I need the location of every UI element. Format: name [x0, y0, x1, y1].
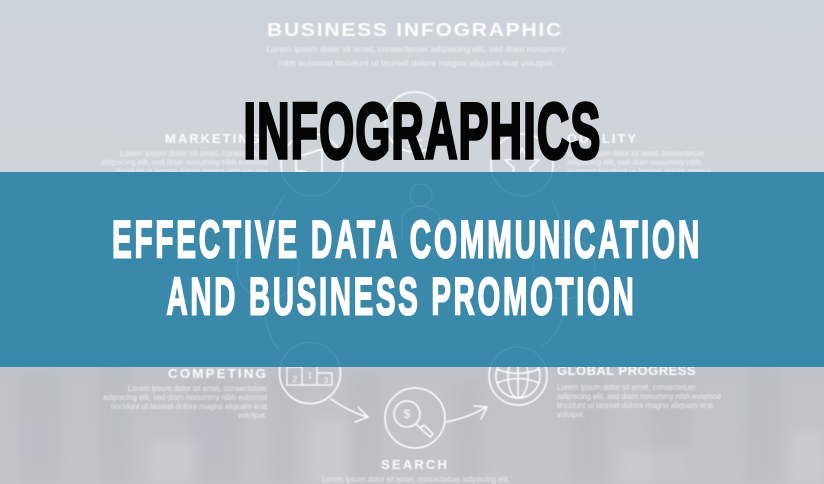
faint artwork behind banner	[237, 134, 595, 405]
marketing block: adipiscing elit, sed diam nonummy nibh euismod	[101, 158, 268, 167]
icon: globe	[489, 347, 547, 405]
marketing block: Lorem ipsum dolor sit amet, consectetuer	[120, 149, 268, 158]
icon: podium: 2	[293, 375, 298, 384]
icon: search magnifier with dollar: $	[404, 407, 411, 421]
quality block: Lorem ipsum dolor sit amet, consectetuer	[567, 149, 705, 158]
global progress heading and text: Lorem ipsum dolor sit amet, consectetuer	[557, 383, 696, 392]
faded infographic artwork	[101, 20, 721, 484]
intro text: Lorem ipsum dolor sit amet, consectetuer adipiscing elit, sed diam nonummy	[266, 45, 566, 54]
quality block: QUALITY	[567, 131, 638, 146]
search heading and text: Lorem ipsum dolor sit amet, consectetuer adipiscing elit,	[322, 475, 510, 484]
search heading and text	[322, 457, 510, 484]
quality block	[567, 131, 711, 176]
icon: podium: 1	[308, 371, 313, 380]
competing heading and text: volutpat.	[238, 411, 267, 420]
icon: search magnifier with dollar	[385, 388, 445, 448]
icon: podium: 3	[324, 376, 329, 385]
marketing block	[101, 131, 269, 176]
marketing block: MARKETING	[165, 131, 262, 146]
global progress heading and text: tincidunt ut laoreet dolore magna aliquam erat	[557, 401, 714, 410]
icon: podium	[280, 342, 340, 404]
competing heading and text: adipiscing elit, sed diam nonummy nibh euismod	[103, 393, 267, 402]
global progress heading and text: adipiscing elit, sed diam nonummy nibh euismod	[557, 392, 721, 401]
intro text	[266, 45, 566, 68]
icon: quality star	[491, 134, 553, 196]
quality block: adipiscing elit, sed diam nonummy nibh	[567, 158, 701, 167]
competing heading and text: tincidunt ut laoreet dolore magna aliquam erat	[111, 402, 268, 411]
arrow: search to global	[446, 406, 487, 422]
competing heading and text: Lorem ipsum dolor sit amet, consectetuer	[128, 384, 267, 393]
global progress heading and text: volutpat.	[557, 410, 585, 419]
arrow: competing to search	[331, 399, 368, 422]
global progress heading and text	[557, 363, 721, 419]
icon: lightbulb	[385, 92, 445, 152]
icon: marketing megaphone	[281, 134, 343, 196]
search heading and text: SEARCH	[381, 457, 449, 472]
banner: teal band	[0, 134, 824, 405]
heading: business infographic: BUSINESS INFOGRAPHIC	[267, 20, 563, 40]
intro text: nibh euismod tincidunt ut laoreet dolore magna aliquam erat volutpat.	[279, 59, 555, 68]
global progress heading and text: GLOBAL PROGRESS	[557, 363, 696, 378]
competing heading and text: COMPETING	[168, 366, 268, 381]
quality block: euismod tincidunt ut laoreet dolore magna	[567, 167, 711, 176]
competing heading and text	[103, 366, 268, 420]
marketing block: tincidunt ut laoreet dolore magna aliquam erat	[116, 167, 269, 176]
